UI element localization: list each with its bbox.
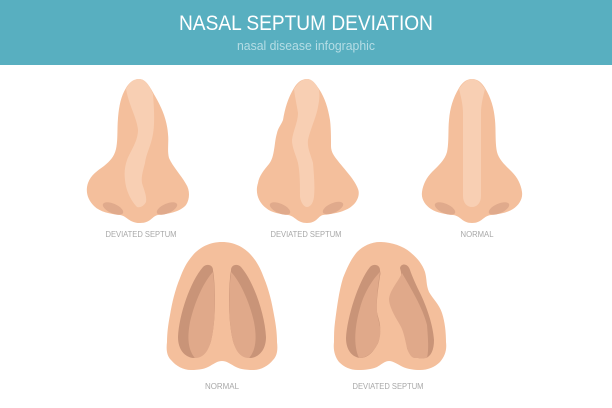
septum highlight <box>125 79 154 207</box>
right nostril <box>155 200 179 217</box>
left nostril <box>101 200 125 217</box>
nostrils view: normal <box>167 242 277 370</box>
left nasal cavity <box>188 272 215 358</box>
left nasal cavity <box>355 272 380 358</box>
right nostril <box>487 200 511 217</box>
subtitle: nasal disease infographic <box>237 39 375 53</box>
right nostril <box>321 199 345 217</box>
nose: deviated septum, left <box>87 79 189 223</box>
nose: normal <box>422 79 522 223</box>
header banner <box>0 0 612 65</box>
right nasal cavity <box>229 272 256 358</box>
septum highlight <box>292 79 319 207</box>
nose: deviated septum, middle <box>257 79 359 223</box>
right nasal wall <box>229 265 266 358</box>
nostrils view: deviated septum <box>334 242 446 370</box>
right nasal cavity <box>389 273 428 358</box>
label: deviated septum left: DEVIATED SEPTUM <box>106 230 177 239</box>
label: deviated septum bottom: DEVIATED SEPTUM <box>352 382 424 391</box>
label: normal bottom: NORMAL <box>205 382 240 391</box>
left nasal wall <box>178 265 215 358</box>
left nasal wall <box>346 265 380 358</box>
septum highlight <box>459 79 485 207</box>
left nostril <box>433 200 457 217</box>
right nasal wall <box>400 264 434 358</box>
label: deviated septum middle: DEVIATED SEPTUM <box>270 230 342 239</box>
title: NASAL SEPTUM DEVIATION <box>179 12 433 35</box>
left nostril <box>268 200 292 217</box>
label: normal right: NORMAL <box>460 230 494 239</box>
